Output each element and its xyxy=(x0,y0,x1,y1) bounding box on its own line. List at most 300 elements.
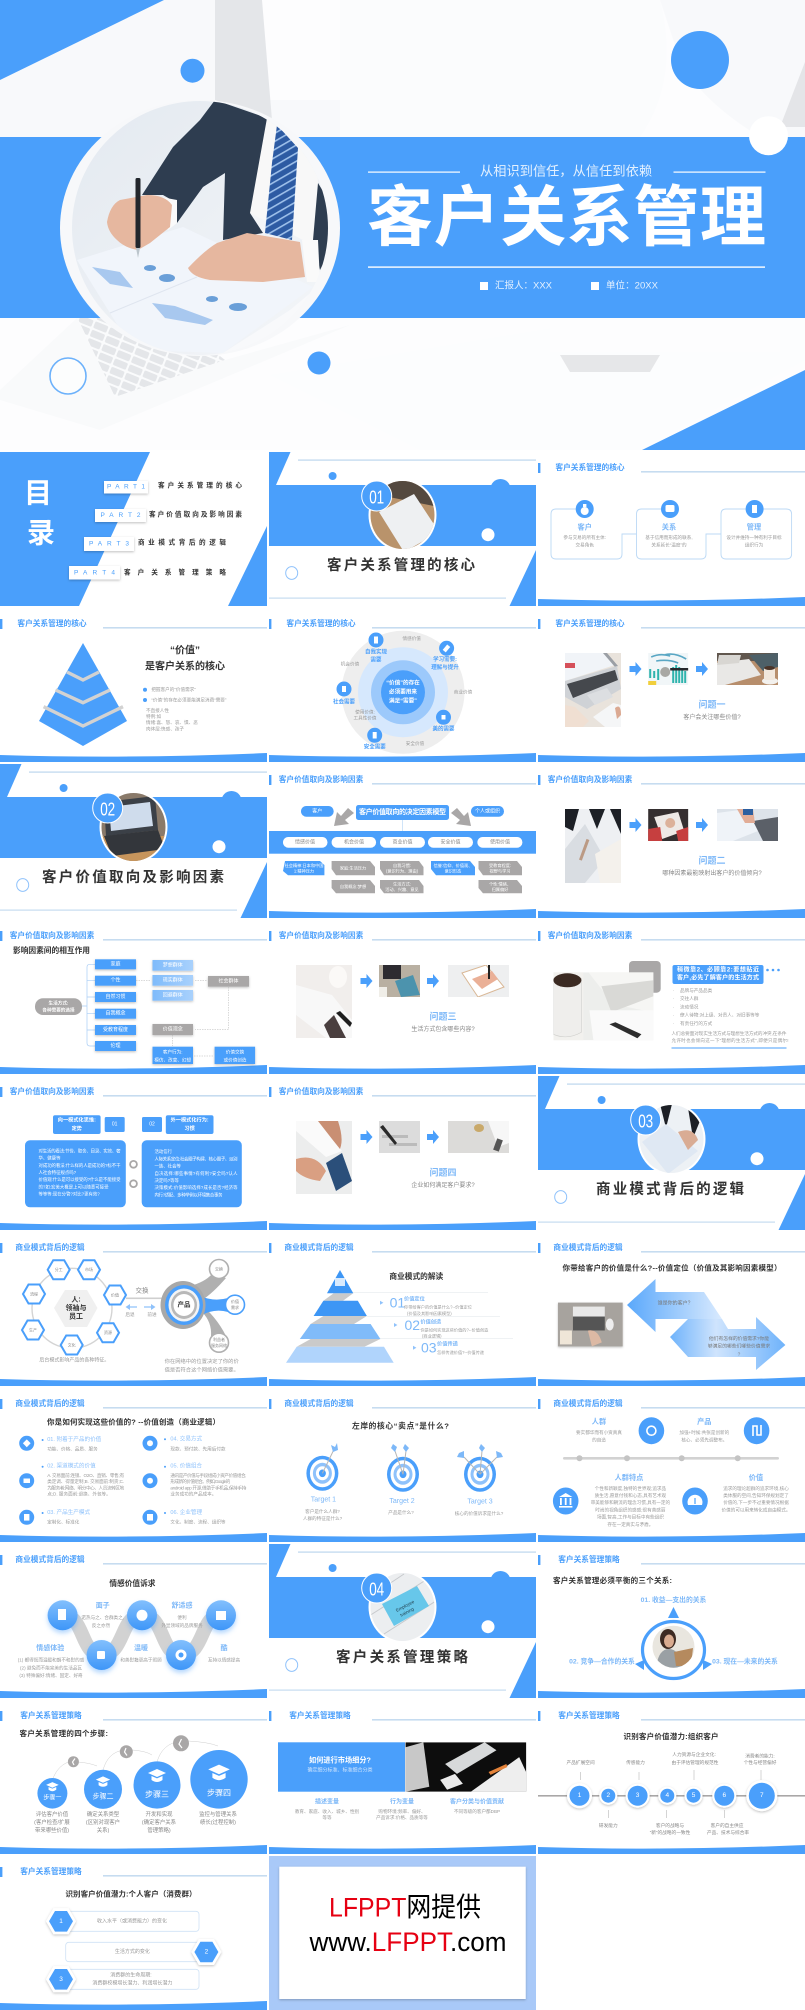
value pills: 商业价值 xyxy=(392,838,413,845)
slide: value positioning xyxy=(538,1232,805,1386)
list left column: 02. 渠道模式的价值 xyxy=(47,1462,96,1470)
callout box: 客户,必先了解客户的生活方式 xyxy=(677,974,759,982)
value notes: “价值”的存在必须要能满足消费“需要” xyxy=(151,696,227,704)
icon: product xyxy=(744,1417,769,1444)
model heading box: 客户价值取向的决定因素模型 xyxy=(359,807,446,816)
section heading: 客户价值取向及影响因素 xyxy=(42,868,224,886)
section photo: training xyxy=(399,1606,415,1618)
question text: 客户会关注哪些价值? xyxy=(683,713,741,721)
value notes: 肉体层:快感、孩子 xyxy=(146,726,184,732)
section photo xyxy=(100,793,168,861)
slide: market segmentation xyxy=(269,1700,536,1854)
step captions: 管理策略) xyxy=(147,1826,171,1834)
step captions: 绩长(过程控制) xyxy=(200,1818,236,1826)
hexagon labels: 资源 xyxy=(104,1329,112,1335)
icon: customer xyxy=(576,500,594,518)
value notes: 不直接人性 xyxy=(146,707,169,714)
numbered nodes: 3 xyxy=(636,1792,640,1799)
contents heading: 目 xyxy=(24,478,52,508)
arrow: value needs: 够满足的哪些们哪些价值需求 xyxy=(708,1342,770,1350)
product satellites: 价值 xyxy=(231,1298,239,1304)
photo: laptop xyxy=(565,653,621,727)
target 2: Target 2 xyxy=(389,1498,415,1505)
question text xyxy=(411,1011,475,1033)
centre text xyxy=(386,678,420,704)
hexagon labels: 生产 xyxy=(29,1326,37,1332)
rule xyxy=(672,1048,786,1049)
value labels: 情感价值 xyxy=(403,635,421,642)
slide title: 客户价值取向及影响因素 xyxy=(279,930,364,940)
item 02: (商业逻辑) xyxy=(422,1332,442,1340)
icon badges xyxy=(336,632,454,743)
factor tags row one: 家庭:生活压力 xyxy=(340,864,366,872)
part 3: PART3 xyxy=(89,540,129,548)
arrow xyxy=(360,974,372,988)
block: customer: 交易角色 xyxy=(576,542,594,548)
number badge: 04 xyxy=(369,1580,384,1600)
pyramid diagram xyxy=(39,643,127,746)
right panel: 一族、社会等 xyxy=(154,1162,181,1170)
row 3: 消费群校模增长潜力、利润增长潜力 xyxy=(92,1980,172,1987)
product satellites xyxy=(210,1260,244,1352)
hexagon nodes xyxy=(22,1260,126,1354)
upper labels: 由于评估管理的规范性 xyxy=(672,1759,719,1766)
factor tags row one: 信誉:信仰、价值观、 xyxy=(434,862,472,869)
bullet list: 流动情况 xyxy=(680,1004,699,1010)
slide: factor interaction flow xyxy=(0,920,267,1074)
subtitle rule right xyxy=(674,172,766,173)
factor boxes: 自我概念 xyxy=(105,1010,126,1017)
factor tags row two: 个性:情绪、 xyxy=(489,880,511,888)
question text: 问题三 xyxy=(429,1011,457,1022)
upper labels: 产品扩展空间 xyxy=(567,1759,595,1766)
step captions: 关系) xyxy=(97,1826,109,1834)
numbered nodes: 7 xyxy=(760,1792,764,1799)
gray connector rings xyxy=(130,1161,137,1187)
corner triangle bottom right xyxy=(642,370,805,450)
left panel: 的?如:宏美大概是上可以随意可接受 xyxy=(38,1184,109,1190)
label: warmth: 温暖 xyxy=(134,1643,148,1652)
column: behaviour xyxy=(376,1798,428,1821)
value notes xyxy=(143,686,227,732)
column: descriptive: 描述变量 xyxy=(315,1798,339,1806)
slide title: 客户价值取向及影响因素 xyxy=(279,1086,364,1096)
pointer lines xyxy=(581,1770,761,1818)
part 2 xyxy=(95,509,242,522)
item 01: 你带给客户的价值是什么?--价值定位 xyxy=(404,1304,472,1310)
product hub xyxy=(160,1274,228,1336)
upper labels: 人力资源与企业文化: xyxy=(672,1751,716,1758)
lifestyle pill xyxy=(35,998,82,1015)
column: segments xyxy=(450,1798,504,1815)
block: product: 加强+时候:共张是创新的 xyxy=(679,1429,730,1436)
item 01: 01 xyxy=(390,1295,405,1311)
question text xyxy=(662,855,762,877)
bullet list xyxy=(673,987,760,1027)
label: experience: 情感体验 xyxy=(36,1643,64,1652)
bullet list: · xyxy=(673,1004,675,1010)
block: relationship: 基于信用而形成的联系, xyxy=(645,534,693,541)
arrow xyxy=(696,662,708,676)
social group box: 社会群体 xyxy=(218,977,239,984)
block: management xyxy=(726,522,782,548)
bullet list: 交往人群 xyxy=(680,995,699,1002)
list right column xyxy=(164,1434,247,1526)
target 3 xyxy=(455,1444,504,1517)
value labels: 安全价值 xyxy=(406,740,425,747)
block: value: 类体服的空间,告知环保规划定了 xyxy=(723,1492,789,1499)
blue corner wedge xyxy=(228,526,267,606)
left panel xyxy=(25,1140,126,1207)
gray arrow left xyxy=(334,808,354,826)
row 1 xyxy=(46,1908,199,1934)
block: management: 设计并维持一种有利于目标 xyxy=(726,534,782,541)
number badge xyxy=(631,1105,661,1135)
left panel: 华、健康等 xyxy=(38,1154,61,1162)
target 1 xyxy=(303,1443,343,1522)
factor tags row one: (意识行为、理由) xyxy=(386,868,419,874)
section photo: Employee xyxy=(395,1599,415,1613)
value pills: 情感价值 xyxy=(295,838,315,845)
part 2: 客户价值取向及影响因素 xyxy=(149,510,242,518)
step captions: 评估客户价值 xyxy=(36,1810,69,1818)
item 02: 02 xyxy=(404,1317,420,1333)
people hexagon: 领袖与 xyxy=(66,1303,86,1312)
arrow: who is your customer: 谁是你的客户? xyxy=(658,1299,691,1306)
people hexagon: 员工 xyxy=(69,1312,83,1320)
arrow xyxy=(360,1130,372,1144)
slide title: 客户关系管理策略 xyxy=(20,1866,82,1876)
list left column: 03. 产品生产模式 xyxy=(47,1508,90,1516)
list right column: android app 开源,借助于手机品,保持手持 xyxy=(170,1484,247,1492)
connector xyxy=(401,820,404,831)
paragraph: 人们总要面对现实生活方式与理想生活方式的冲突,在条件 xyxy=(672,1030,787,1037)
step 3: 步骤三 xyxy=(145,1790,169,1799)
behaviour box xyxy=(152,1047,193,1064)
numbered nodes: 2 xyxy=(606,1792,610,1799)
upper labels: 个性与经营偏好 xyxy=(744,1759,777,1766)
concentric circles xyxy=(342,631,464,754)
product satellites: 需求 xyxy=(231,1304,239,1310)
column: behaviour: 购物环境:频率、偏好、 xyxy=(378,1808,426,1815)
value labels: 使用价值: xyxy=(355,708,375,716)
value notes: 情绪:喜、怒、哀、惧、恶 xyxy=(146,719,198,726)
block: people traits: 人群特点 xyxy=(615,1473,643,1482)
block: management: 组织行为 xyxy=(745,542,764,548)
hexagon labels: 价值 xyxy=(111,1292,119,1298)
photo: newsprint and pen xyxy=(379,1121,420,1153)
need labels: 自我实现 xyxy=(365,648,387,656)
hexagon labels xyxy=(29,1266,119,1348)
photo: keyboard on marble xyxy=(448,1121,509,1153)
upper labels xyxy=(567,1751,777,1766)
label: comfort xyxy=(161,1600,203,1629)
label: face: 面子 xyxy=(96,1602,110,1610)
timeline axis xyxy=(538,1795,805,1797)
step captions xyxy=(34,1810,237,1834)
block: product: 产品 xyxy=(697,1417,711,1426)
block: people: 人群 xyxy=(592,1417,606,1426)
slide title: 客户关系管理的核心 xyxy=(17,618,87,628)
connected outline boxes xyxy=(551,509,792,559)
label: experience xyxy=(18,1643,85,1679)
blue slanted panel xyxy=(0,452,150,606)
slide: question two xyxy=(538,764,805,918)
value labels: 商业价值 xyxy=(454,688,473,696)
label: experience: (1) 都得既而温暖和朝不和慰的感 xyxy=(18,1656,85,1664)
right panel xyxy=(142,1140,242,1207)
photo: calculator xyxy=(296,1121,352,1194)
circle icons xyxy=(58,1609,226,1660)
slide: section 03 xyxy=(538,1076,805,1230)
photo: team xyxy=(565,809,621,883)
label: experience: (2) 避免而不能完美的生活品瓦 xyxy=(20,1664,82,1672)
block: relationship: 关系延长“温度”的 xyxy=(651,542,687,548)
question text: 生活方式包含哪些内容? xyxy=(411,1025,475,1033)
lower labels: 研发能力 xyxy=(599,1822,618,1829)
photo: coffee and notebook xyxy=(553,972,654,1040)
slide: organisational customers xyxy=(538,1700,805,1854)
part 1 xyxy=(104,480,242,494)
bullet list: · xyxy=(673,1012,675,1018)
need labels: 理解与提升 xyxy=(431,663,459,671)
blue question panel: 确定细分标准、标准细合分类 xyxy=(307,1767,373,1774)
label: cool xyxy=(208,1643,240,1664)
lower labels: 客户的自主供应 xyxy=(711,1822,744,1829)
badge 01: 01 xyxy=(112,1122,118,1128)
exchange box: 价值交换 xyxy=(226,1048,245,1056)
number badge: 03 xyxy=(638,1112,653,1132)
white panel xyxy=(279,1867,526,1999)
upper labels: 消费者的能力: xyxy=(745,1752,775,1760)
mindset box: 向一模式化思维: xyxy=(58,1116,96,1124)
value headline: “价值” xyxy=(170,644,200,656)
caption right xyxy=(165,1357,239,1373)
arrows back and forward xyxy=(125,1304,157,1318)
label: face: 反之亦然 xyxy=(92,1622,111,1629)
heading: 客户关系管理的四个步骤: xyxy=(20,1728,108,1738)
slide: value creation list xyxy=(0,1388,267,1542)
value pills: 使用价值 xyxy=(490,838,510,845)
hexagon labels: 市场 xyxy=(85,1266,93,1272)
value labels: 工具性价值 xyxy=(354,714,377,722)
factor boxes: 家庭 xyxy=(110,960,121,967)
slide: emotional value xyxy=(0,1544,267,1698)
factor tags row two: 归属偏好 xyxy=(492,886,508,893)
icon: bank xyxy=(553,1488,578,1514)
photo: desk xyxy=(717,653,778,685)
slide title: 商业模式背后的逻辑 xyxy=(15,1398,85,1408)
lower labels xyxy=(599,1822,749,1836)
part 2: PART2 xyxy=(100,512,141,519)
badge 01 xyxy=(105,1117,125,1132)
bullet list: 品牌与产品品类 xyxy=(680,987,713,994)
block: product: 核心、必须先调整布。 xyxy=(681,1436,727,1444)
row 1: 收入水平（或消费能力）的变化 xyxy=(97,1917,167,1924)
part 4: 客户关系管理策略 xyxy=(124,568,226,576)
product hub: 产品 xyxy=(178,1300,191,1308)
group boxes: 现实群体 xyxy=(163,976,183,983)
column: descriptive: 教育、家庭、收入、城乡、性别 xyxy=(295,1808,360,1815)
label: comfort: 舒适感 xyxy=(172,1600,192,1610)
arrow: value needs xyxy=(670,1317,785,1370)
provider line: LFPPT网提供 xyxy=(329,1893,481,1923)
label: cool: 酷 xyxy=(220,1643,228,1652)
value labels: 机会价值 xyxy=(341,660,360,668)
hero slide: cover xyxy=(0,0,805,450)
slide: core relationships xyxy=(538,452,805,606)
heading: 识别客户价值潜力:个人客户（消费群） xyxy=(66,1888,196,1898)
right panel: 决定吗?等等 xyxy=(154,1177,180,1184)
centre text: “价值”的存在 xyxy=(386,678,420,686)
left panel: 对生活的看法:节俭、取舍、目录、实效、奢 xyxy=(38,1148,121,1154)
icon: gauge xyxy=(682,1488,708,1514)
left panel: 价值观:什么是可以接受的?什么是不能接受 xyxy=(38,1176,121,1183)
slide title: 客户关系管理策略 xyxy=(289,1710,351,1720)
label: comfort: 外显领域的品牌服务 xyxy=(161,1622,203,1629)
arrow xyxy=(427,974,439,988)
block: value: 价值的,下一步不过重要情况根据 xyxy=(723,1499,789,1506)
website line: www.LFPPT.com xyxy=(309,1927,507,1957)
badge 02 xyxy=(142,1117,162,1132)
arrow xyxy=(696,818,708,832)
item 01: (价值及其影响因素模型) xyxy=(407,1310,452,1317)
sub heading: 影响因素间的相互作用 xyxy=(13,945,90,955)
number badge xyxy=(362,481,392,511)
slide title: 客户关系管理策略 xyxy=(558,1710,620,1720)
list right column: 05. 价值组合 xyxy=(170,1462,203,1470)
item 01: 价值定位 xyxy=(404,1295,425,1303)
list left column: 点;D. 服务面前:退换、外包等。 xyxy=(47,1490,111,1498)
block: people traits: 存在一定真实与矛盾。 xyxy=(607,1521,653,1528)
slide title: 客户关系管理的核心 xyxy=(555,618,625,628)
arrow xyxy=(427,1130,439,1144)
target 3: Target 3 xyxy=(467,1498,493,1506)
slide: concentric needs diagram xyxy=(269,608,536,762)
hexagon labels: 文化 xyxy=(68,1342,76,1348)
slide: three relationships xyxy=(538,1544,805,1698)
bullet list: 僚人待物:对上级、对贵人、对旧事等等 xyxy=(680,1012,760,1018)
step captions: (确定客户关系 xyxy=(142,1818,177,1826)
numbered nodes: 1 xyxy=(578,1792,582,1799)
factor boxes: 伦理 xyxy=(110,1042,121,1049)
right panel: 自决选择:哪些事情?有何利?安全吗?认人 xyxy=(154,1170,238,1177)
group boxes: 回避群体 xyxy=(163,991,183,998)
step 2 xyxy=(84,1770,122,1809)
slide title: 客户关系管理的核心 xyxy=(555,462,625,472)
label: comfort: 便利 xyxy=(177,1614,187,1621)
block: product xyxy=(679,1417,730,1444)
row 2: 生活方式的变化 xyxy=(115,1948,150,1955)
lower labels: “新”的战略的一致性 xyxy=(650,1829,691,1836)
value pills: 机会价值 xyxy=(344,838,364,845)
step captions: 确定关系类型 xyxy=(87,1810,120,1818)
step captions: 带来哪些价值) xyxy=(35,1826,69,1834)
part 3: 商业模式背后的逻辑 xyxy=(138,538,226,546)
reporter info: 汇报人：XXX xyxy=(495,280,553,292)
factor tags row two: 生活方式: xyxy=(393,880,411,888)
question text: 问题一 xyxy=(698,699,726,710)
timeline xyxy=(563,1455,779,1461)
list right column: 形成新的价值组合。例如,Google的 xyxy=(170,1478,231,1485)
block: people: 要实都华而有小资真真 xyxy=(576,1429,622,1436)
slide: value model xyxy=(269,764,536,918)
row 3: 消费群的生命周期: xyxy=(110,1972,152,1979)
photo: papers and hands xyxy=(648,809,688,841)
item 02: 价值创造 xyxy=(420,1318,442,1326)
background photo: pale office scene xyxy=(0,0,805,450)
icon: relationship xyxy=(661,500,679,518)
target 3: 核心的价值诉求是什么? xyxy=(455,1510,504,1517)
hexagon labels: 流程 xyxy=(30,1290,38,1296)
item 01 xyxy=(380,1295,472,1317)
need labels: 美的需要 xyxy=(432,724,455,732)
step captions: (区别对现客户 xyxy=(86,1818,120,1826)
right panel: 内行?适配、多种举例以环境集合事务 xyxy=(154,1192,223,1198)
target 1: 客户是什么人群? xyxy=(305,1508,340,1515)
slide: table of contents xyxy=(0,452,267,606)
list right column: 通讯是产价值与手段组成小资产价值组合, xyxy=(170,1472,246,1479)
target 2: 产品是什么? xyxy=(388,1509,414,1516)
block: value: 价值的可以用来转化成自由模式。 xyxy=(722,1506,790,1514)
heading: 客户关系管理必须平衡的三个关系: xyxy=(553,1575,672,1585)
question text: 问题二 xyxy=(698,855,726,866)
slide: question four xyxy=(269,1076,536,1230)
slide title: 客户价值取向及影响因素 xyxy=(548,930,633,940)
arrow: value needs: ? xyxy=(738,1352,741,1358)
relation 01: 01. 收益—支出的关系 xyxy=(641,1595,707,1604)
paragraph xyxy=(672,1030,788,1044)
numbered nodes: 4 xyxy=(665,1792,669,1799)
need labels: 需要 xyxy=(370,657,382,664)
people hexagon: 人: xyxy=(71,1296,81,1304)
section heading: 客户关系管理的核心 xyxy=(327,556,476,574)
slide title: 客户价值取向及影响因素 xyxy=(279,774,364,784)
factor tags row two: 活动、兴趣、意见 xyxy=(385,886,419,893)
item 02 xyxy=(394,1317,489,1340)
mindset box: 定势 xyxy=(72,1124,83,1132)
icon badges xyxy=(19,1436,158,1525)
photo: home desk xyxy=(379,965,420,997)
number badge xyxy=(362,1573,392,1603)
column: segments: 客户分类与价值贡献 xyxy=(450,1798,504,1806)
values box xyxy=(152,1024,193,1035)
slide: lifestyle details xyxy=(538,920,805,1074)
arrows back and forward: 前进 xyxy=(147,1311,157,1318)
question text: 企业如何满足客户要求? xyxy=(411,1181,475,1189)
group boxes: 梦想群体 xyxy=(163,961,183,968)
block: people xyxy=(576,1417,622,1444)
slide: value pyramid xyxy=(0,608,267,762)
arrow xyxy=(630,662,642,676)
list right column: 04. 交易方式 xyxy=(170,1434,203,1442)
block: people: 的自造 xyxy=(592,1436,606,1444)
step 2: 步骤二 xyxy=(92,1792,114,1800)
step captions: 监控与管理关系 xyxy=(199,1810,237,1818)
paragraph: 允许时也会倾向这一下“理想的生活方式”,即便只是偶尔! xyxy=(672,1037,788,1044)
decorative white circle xyxy=(749,116,788,155)
slide: section 02 xyxy=(0,764,267,918)
slide title: 客户价值取向及影响因素 xyxy=(10,1086,95,1096)
slide: mindset and habit xyxy=(0,1076,267,1230)
slide title: 商业模式背后的逻辑 xyxy=(553,1242,623,1252)
centre text: 满足“需要” xyxy=(389,696,417,704)
arrow: value needs: 他们有怎样的价值需求?你能 xyxy=(709,1335,769,1342)
caption right: 你在网络中的位置决定了你的价 xyxy=(165,1357,239,1365)
factor tags row one: 1:精神压力 xyxy=(294,868,314,874)
list right column: 现款、预付款、先用后付款 xyxy=(170,1446,226,1452)
factor tags row one: 视野与学习 xyxy=(490,868,510,874)
